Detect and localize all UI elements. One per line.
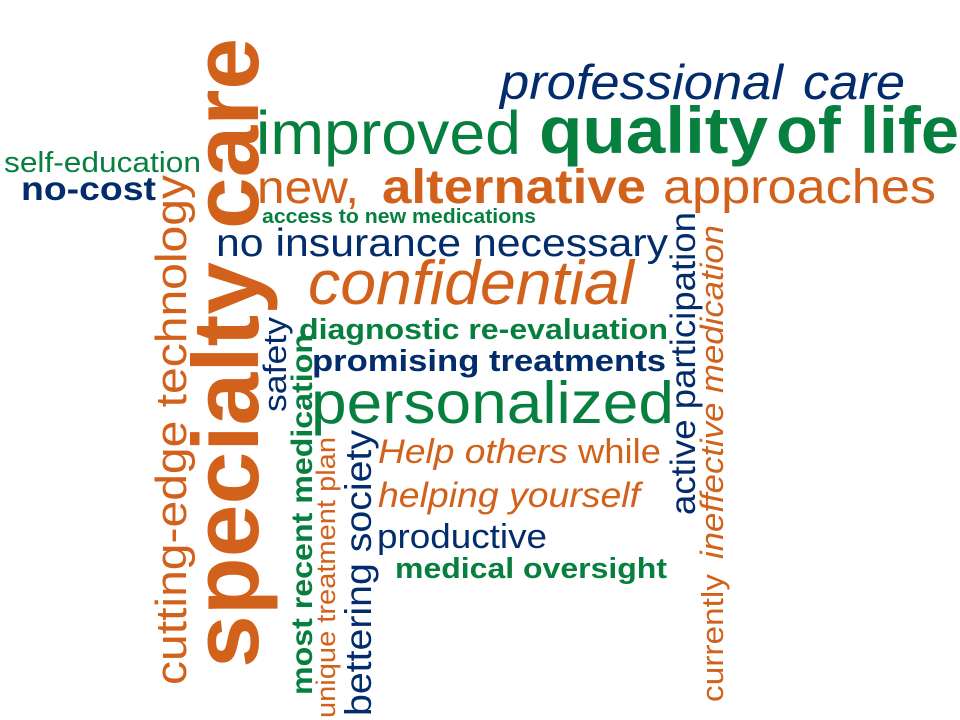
word: bettering society: bettering society — [338, 429, 379, 716]
word: alternative: alternative — [382, 161, 646, 214]
word: Help others while: Help others — [378, 433, 568, 471]
word: currently ineffective medication — [694, 225, 730, 702]
word: currently ineffective medication: currently — [695, 573, 730, 702]
word: access to new medications: access to new medications — [262, 206, 536, 228]
word: quality: quality — [539, 93, 768, 167]
word: helping yourself: helping yourself — [378, 476, 643, 515]
word: care: care — [173, 38, 278, 229]
word: safety: safety — [257, 317, 293, 412]
word: specialty: specialty — [173, 262, 278, 668]
word: productive: productive — [377, 518, 547, 556]
word: Help others while: while — [577, 433, 661, 471]
word: new,: new, — [257, 161, 359, 213]
word: self-education: self-education — [4, 147, 201, 179]
word: personalized: personalized — [311, 370, 674, 436]
word: medical oversight: medical oversight — [395, 553, 667, 585]
word: currently ineffective medication: ineffective medication — [694, 225, 730, 559]
word: professional care — [498, 56, 905, 110]
word: professional care: care — [803, 56, 905, 110]
word: approaches: approaches — [663, 161, 936, 214]
word: of life: of life — [776, 93, 959, 167]
word: no insurance necessary: no insurance necessary — [216, 222, 669, 265]
word: professional care: professional — [498, 56, 784, 110]
word: active participation: active participation — [664, 212, 703, 515]
word: diagnostic re-evaluation: diagnostic re-evaluation — [299, 314, 668, 346]
word: improved: improved — [256, 99, 521, 167]
word: confidential: confidential — [308, 249, 636, 318]
word: unique treatment plan: unique treatment plan — [311, 437, 341, 718]
word: no-cost: no-cost — [21, 170, 156, 207]
word: Help others while — [378, 433, 661, 471]
word: most recent medication: most recent medication — [286, 334, 319, 695]
word: cutting-edge technology: cutting-edge technology — [147, 175, 196, 685]
word: promising treatments: promising treatments — [312, 343, 666, 378]
